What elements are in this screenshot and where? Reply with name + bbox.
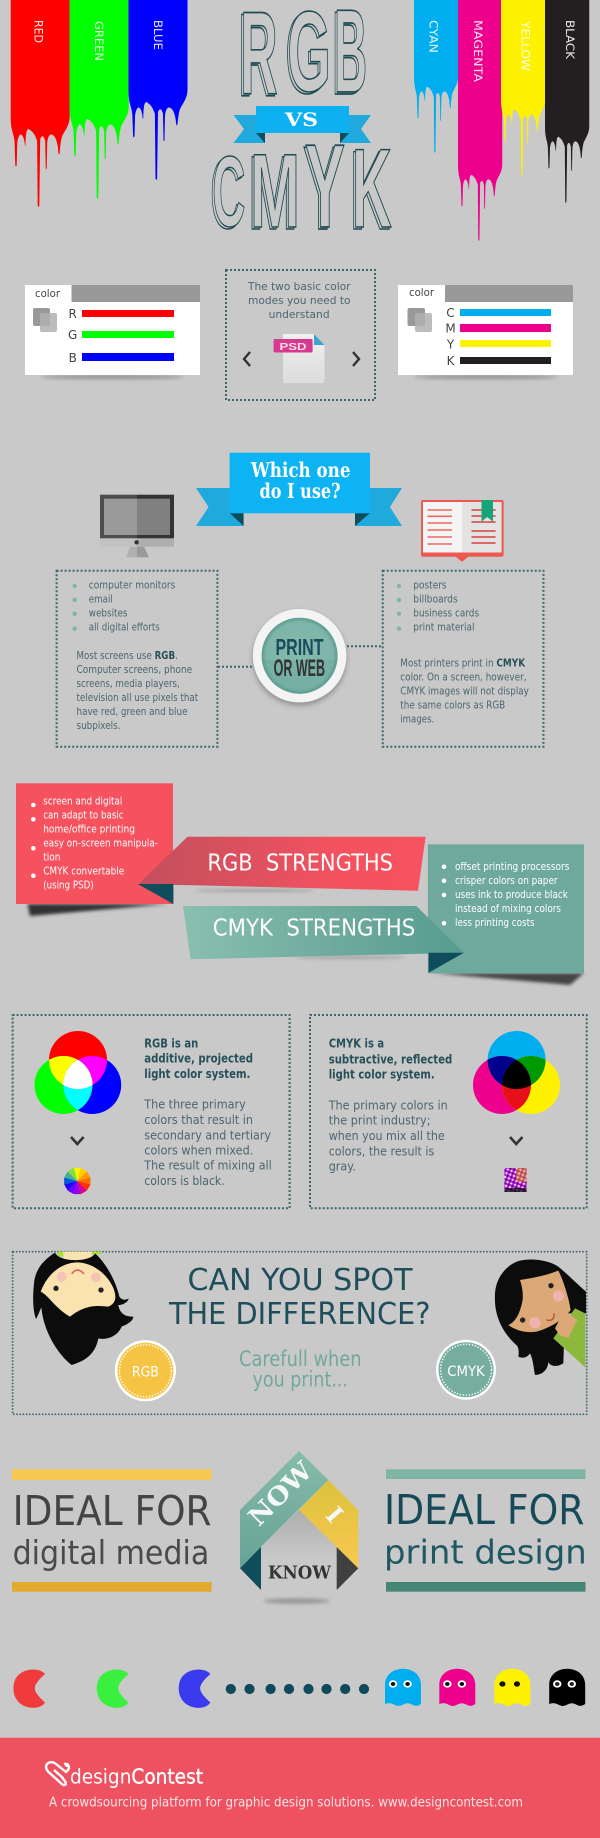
list: print uses: posters [413, 579, 447, 592]
ghost: cyan [385, 1669, 421, 1706]
red paint column: RED [32, 20, 46, 43]
panel: spot the difference [13, 1252, 587, 1414]
text: CMYK heading: CMYK is a [329, 1036, 384, 1051]
red paint column [11, 0, 70, 207]
label: yellow: YELLOW [518, 20, 532, 71]
emblem: now I know [240, 1451, 358, 1604]
paint drips: CMYK [414, 0, 589, 241]
panel: CMYK color picker [398, 285, 573, 380]
panel: two basic color modes: The two basic color [247, 280, 351, 293]
text: RGB heading: RGB is an [144, 1035, 198, 1050]
illustration: upside-down girl [33, 1252, 133, 1365]
panel: CMYK strengths list [428, 844, 584, 985]
list: print uses [397, 579, 479, 634]
heading: can you spot the difference: THE DIFFERENCE? [168, 1297, 430, 1332]
diagram: subtractive color circles [473, 1031, 560, 1114]
panel: RGB additive [13, 1015, 290, 1208]
badge: print or web [253, 609, 346, 702]
text: about RGB screens: screens, media players, [76, 677, 180, 690]
green paint column: GREEN [92, 21, 106, 61]
footer [0, 1738, 600, 1838]
panel: CMYK color picker: Y [446, 338, 455, 352]
text: about CMYK printers [400, 657, 529, 726]
text: RGB heading: additive, projected [144, 1051, 253, 1066]
text: careful when you print: Carefull when [239, 1347, 362, 1371]
banner: CMYK strengths: CMYK STRENGTHS [213, 916, 415, 942]
banner: RGB strengths [138, 837, 426, 904]
panel: RGB color picker [25, 285, 200, 380]
panel: RGB color picker: B [69, 351, 77, 365]
text: about RGB screens [76, 649, 199, 732]
connector: left [218, 666, 253, 668]
label: magenta: MAGENTA [471, 20, 485, 82]
text: CMYK heading [329, 1036, 452, 1081]
panel: RGB strengths list: home/office printing [43, 822, 135, 835]
title: CMYK: C [210, 139, 244, 250]
text: about RGB screens: subpixels. [76, 719, 120, 732]
title: CMYK: Y [303, 122, 343, 254]
text: RGB description: colors when mixed. [144, 1142, 253, 1157]
block: ideal for digital media: digital media [13, 1533, 209, 1572]
text: RGB description: colors that result in [144, 1112, 253, 1127]
text: about CMYK printers: the same colors as RGB [400, 699, 505, 712]
icon: left chevron [244, 352, 250, 366]
icon: open book [421, 500, 504, 562]
text: RGB description: secondary and tertiary [144, 1127, 272, 1142]
panel: RGB color picker: G [68, 328, 77, 342]
ribbon: which one do I use: do I use? [260, 479, 340, 503]
ribbon: which one do I use: Which one [250, 458, 350, 482]
badge: CMYK: CMYK [447, 1364, 486, 1380]
panel: RGB strengths list: can adapt to basic [43, 808, 124, 821]
panel: RGB strengths list: tion [43, 850, 60, 863]
title: CMYK: Y [305, 120, 345, 252]
title: RGB [238, 0, 367, 122]
panel: CMYK strengths list: offset printing processors [455, 860, 570, 873]
pacman: blue [180, 1670, 209, 1707]
badge: CMYK [436, 1340, 496, 1400]
text: about CMYK printers: images. [400, 713, 434, 726]
text: CMYK description: the print industry; [329, 1113, 430, 1128]
text: about RGB screens: Computer screens, phone [76, 663, 192, 676]
diagram: additive color circles [34, 1031, 121, 1114]
ghost: yellow [494, 1669, 530, 1706]
panel: two basic color modes: modes you need to [248, 294, 351, 307]
banner: CMYK strengths [183, 906, 464, 973]
panel: CMYK color picker: C [446, 306, 455, 320]
panel: printers use CMYK [383, 571, 544, 747]
panel: CMYK strengths list: uses ink to produce black [455, 888, 568, 901]
text: CMYK description: colors, the result is [329, 1143, 434, 1158]
icon: monitor [100, 495, 174, 557]
title: CMYK: K [350, 127, 390, 253]
badge: RGB [115, 1340, 176, 1401]
panel: RGB strengths list: CMYK convertable [43, 864, 124, 877]
ribbon: which one do I use [196, 453, 402, 526]
text: CMYK description: gray. [329, 1159, 356, 1174]
label: cyan: CYAN [426, 20, 440, 53]
banner: RGB strengths: RGB STRENGTHS [207, 851, 393, 877]
text: RGB heading [144, 1035, 253, 1081]
tagline: A crowdsourcing platform for graphic design solutions. www.designcontest.com [49, 1796, 523, 1811]
title: CMYK [210, 120, 392, 254]
panel: RGB color picker: color [35, 287, 60, 300]
logo: wordmark: designContest [70, 1764, 203, 1788]
list: digital uses: all digital efforts [89, 621, 160, 634]
emblem: now I know: I [320, 1501, 349, 1529]
ghost: magenta [439, 1669, 475, 1706]
panel: RGB strengths list: (using PSD) [43, 878, 94, 891]
text: CMYK description: The primary colors in [328, 1097, 448, 1112]
panel: CMYK strengths list: crisper colors on paper [455, 874, 558, 887]
black paint column [545, 0, 589, 203]
text: CMYK heading: subtractive, reflected [329, 1051, 452, 1066]
logo: heart mark [46, 1762, 69, 1785]
label: black: BLACK [563, 20, 577, 59]
connector: right [347, 645, 383, 647]
title: CMYK: K [352, 125, 392, 251]
panel: RGB strengths list: screen and digital [43, 794, 122, 807]
paint drips: RGB [11, 0, 188, 207]
badge: print or web: PRINT [276, 634, 324, 660]
text: careful when you print [239, 1347, 362, 1392]
icon: PSD file [274, 334, 324, 383]
icon: right chevron [353, 352, 359, 366]
badge: print or web: OR WEB [274, 655, 325, 682]
panel: RGB strengths list [16, 783, 173, 916]
text: RGB description: The three primary [143, 1097, 246, 1112]
green paint column [70, 0, 129, 199]
heading: can you spot the difference: CAN YOU SPOT [188, 1263, 413, 1298]
panel: RGB color picker: R [69, 307, 77, 321]
title: CMYK: C [212, 137, 246, 248]
title: CMYK: M [250, 134, 300, 250]
emblem: now I know: KNOW [268, 1562, 332, 1583]
list: print uses: billboards [413, 593, 458, 606]
emblem: now I know: NOW [243, 1455, 319, 1532]
title: CMYK: M [248, 136, 298, 252]
list: print uses: business cards [413, 607, 479, 620]
panel: CMYK subtractive [310, 1015, 587, 1208]
panel: CMYK strengths list: less printing costs [455, 916, 535, 929]
icon: down chevron [71, 1137, 84, 1144]
ghost: black [549, 1669, 585, 1706]
list: digital uses [72, 579, 176, 634]
pellets [226, 1684, 369, 1694]
list: digital uses: computer monitors [89, 579, 176, 592]
text: about CMYK printers: CMYK images will not display [400, 685, 529, 698]
pacman: green [98, 1670, 127, 1707]
illustration: sideways girl [495, 1260, 586, 1375]
heading: can you spot the difference [168, 1263, 430, 1332]
list: digital uses: email [89, 593, 113, 606]
panel: CMYK color picker: M [445, 322, 456, 336]
icon: PSD file: PSD [280, 341, 307, 353]
blue paint column [128, 0, 188, 180]
text: RGB heading: light color system. [144, 1066, 250, 1081]
magenta paint column [458, 0, 502, 241]
badge: RGB: RGB [132, 1365, 159, 1381]
pacman: red [15, 1670, 44, 1707]
text: CMYK description: when you mix all the [329, 1128, 445, 1143]
block: ideal for print design: IDEAL FOR [384, 1486, 584, 1534]
panel: two basic color modes [226, 270, 375, 400]
text: about RGB screens: Most screens use RGB. [76, 649, 178, 662]
text: about CMYK printers: Most printers print in CMYK [400, 657, 525, 670]
ribbon: VS: VS [284, 109, 318, 131]
ribbon: VS [234, 106, 371, 143]
text: CMYK description [328, 1097, 448, 1174]
text: RGB description: colors is black. [144, 1173, 225, 1188]
panel: RGB strengths list: easy on-screen manipula- [43, 836, 158, 849]
panel: CMYK strengths list: instead of mixing colors [455, 902, 561, 915]
block: ideal for digital media [12, 1469, 212, 1592]
panel: screens use RGB [57, 571, 217, 747]
text: about RGB screens: television all use pixels that [76, 691, 199, 704]
text: RGB description: The result of mixing all [143, 1158, 272, 1173]
text: about CMYK printers: color. On a screen, however, [400, 671, 527, 684]
icon: halftone swatch [504, 1168, 527, 1192]
panel: CMYK color picker: color [409, 286, 434, 299]
text: careful when you print: you print... [253, 1368, 348, 1392]
block: ideal for print design: print design [384, 1532, 587, 1571]
block: ideal for print design [384, 1469, 587, 1592]
text: RGB description [143, 1097, 272, 1188]
text: CMYK heading: light color system. [329, 1066, 435, 1081]
panel: two basic color modes: understand [269, 308, 330, 321]
cyan paint column [414, 0, 458, 153]
block: ideal for digital media: IDEAL FOR [13, 1487, 212, 1535]
icon: color wheel [64, 1168, 90, 1194]
panel: CMYK color picker: K [447, 354, 456, 368]
list: print uses: print material [413, 621, 474, 634]
yellow paint column [501, 0, 545, 176]
text: about RGB screens: have red, green and blue [76, 705, 188, 718]
blue paint column: BLUE [151, 20, 165, 50]
icon: down chevron [510, 1137, 522, 1144]
list: digital uses: websites [89, 607, 128, 620]
